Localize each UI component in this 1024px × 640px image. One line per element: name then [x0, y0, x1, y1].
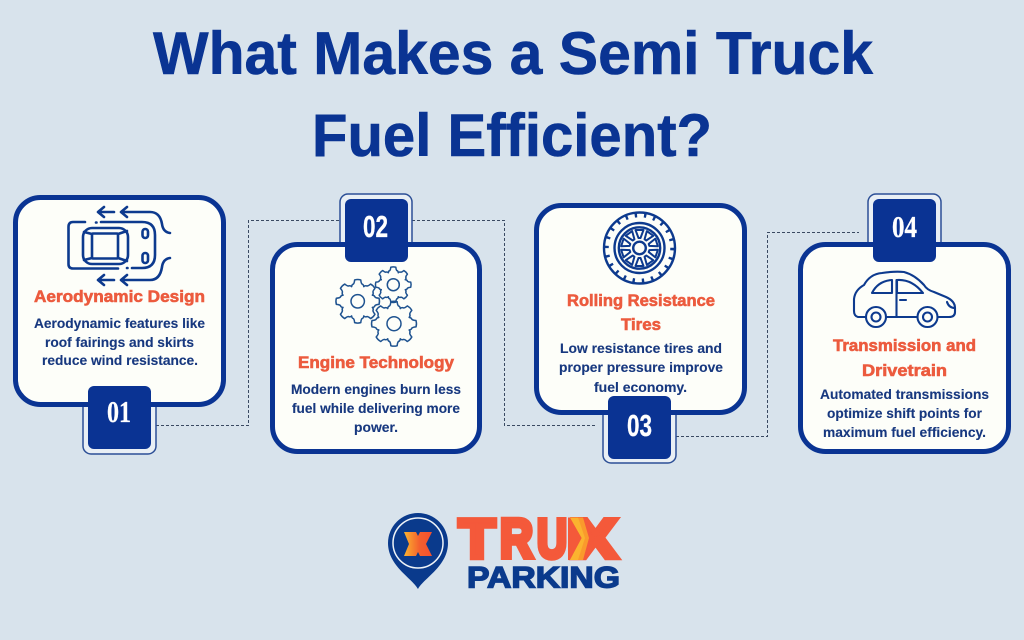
- badge 03: [608, 396, 671, 459]
- heading: rolling resistance tires: Rolling Resistance: [567, 292, 715, 310]
- wordmark: T: [459, 508, 495, 570]
- text: aerodynamic description: reduce wind resistance.: [42, 353, 198, 368]
- heading: engine technology: Engine Technology: [298, 354, 455, 372]
- heading: transmission and drivetrain: Transmission and: [833, 337, 976, 355]
- text: transmission description: [820, 387, 989, 440]
- wordmark: [459, 508, 620, 594]
- icon: car top view with airflow arrows: [68, 207, 170, 285]
- text: engine description: [291, 382, 461, 435]
- text: tires description: fuel economy.: [594, 380, 687, 395]
- heading: rolling resistance tires: Tires: [621, 316, 661, 334]
- title: Fuel Efficient?: [312, 102, 712, 169]
- connector: 01 to 02: [156, 220, 340, 426]
- wordmark: PARKING: [467, 562, 620, 594]
- connector: 02 to 03: [412, 220, 596, 426]
- panel: engine technology: [272, 194, 480, 452]
- text: engine description: Modern engines burn less: [291, 382, 461, 397]
- title: [153, 20, 874, 169]
- badge 01: 01: [107, 394, 131, 429]
- panel: rolling resistance tires: [536, 206, 744, 463]
- text: aerodynamic description: roof fairings and skirts: [45, 335, 194, 350]
- text: tires description: proper pressure improve: [559, 360, 723, 375]
- wordmark: X: [574, 508, 617, 570]
- icon: gears: [336, 267, 416, 346]
- icon: tire: [604, 212, 675, 284]
- text: engine description: fuel while delivering more: [292, 401, 460, 416]
- connector: 03 to 04: [676, 232, 859, 436]
- text: transmission description: optimize shift points for: [827, 406, 983, 421]
- wordmark: U: [537, 508, 567, 570]
- wordmark: R: [500, 508, 533, 570]
- icon: car side view: [854, 272, 955, 327]
- panel: aerodynamic design: [16, 198, 224, 454]
- badge 04: [873, 199, 936, 262]
- badge 02: 02: [363, 209, 388, 244]
- text: transmission description: maximum fuel efficiency.: [823, 425, 986, 440]
- heading: rolling resistance tires: [567, 292, 715, 334]
- badge 02: [345, 199, 408, 262]
- heading: aerodynamic design: Aerodynamic Design: [34, 288, 205, 306]
- text: engine description: power.: [354, 420, 398, 435]
- badge 04: 04: [892, 209, 917, 244]
- text: transmission description: Automated transmissions: [820, 387, 989, 402]
- panel: transmission and drivetrain: [800, 194, 1008, 452]
- badge 01: [88, 386, 151, 449]
- text: tires description: Low resistance tires and: [560, 341, 722, 356]
- logo: Trux Parking: [388, 508, 620, 594]
- badge 03: 03: [627, 408, 652, 443]
- text: tires description: [559, 341, 723, 395]
- icon: map pin: [388, 513, 448, 589]
- heading: transmission and drivetrain: [833, 337, 976, 380]
- text: aerodynamic description: Aerodynamic features like: [34, 316, 205, 331]
- text: aerodynamic description: [34, 316, 205, 368]
- heading: transmission and drivetrain: Drivetrain: [862, 362, 947, 380]
- title: What Makes a Semi Truck: [153, 20, 874, 87]
